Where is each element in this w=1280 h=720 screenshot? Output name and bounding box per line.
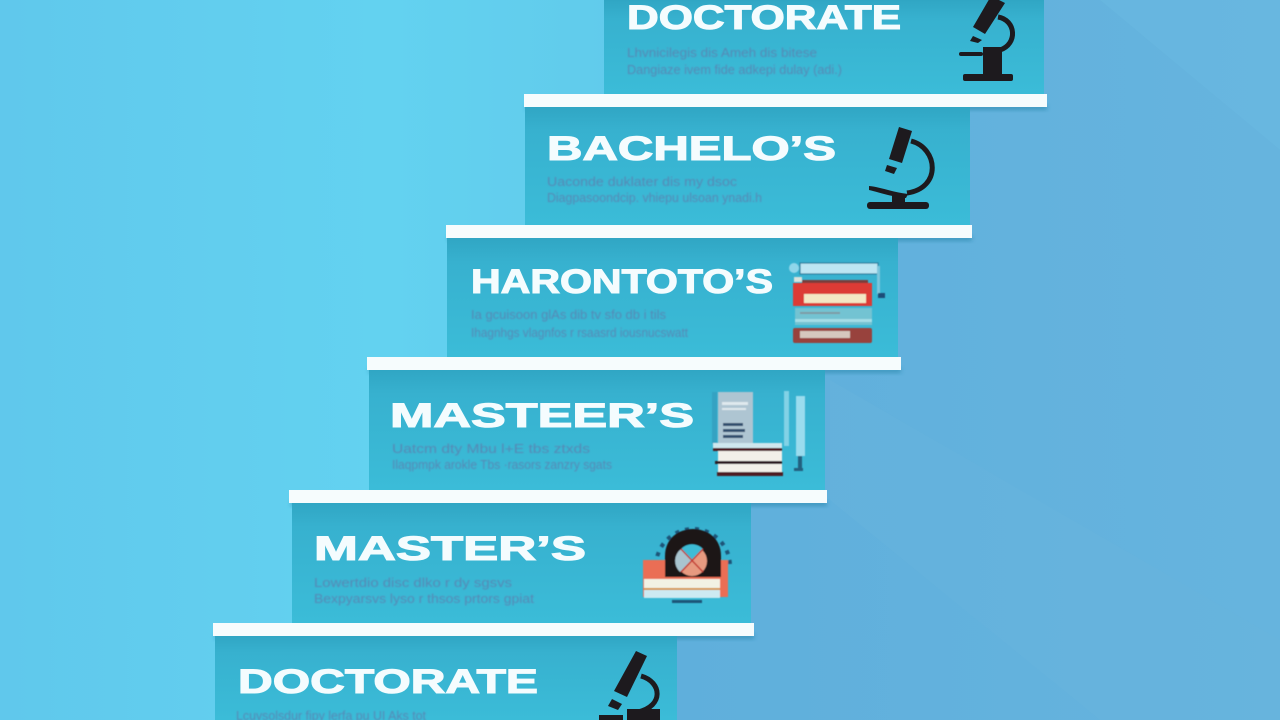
description: Ilaqpmpk arokle Tbs ·rasors zanzry sgats <box>392 457 612 472</box>
icon: microscope <box>959 0 1013 81</box>
shelf 1 <box>524 94 1047 110</box>
shelf 4 <box>289 490 827 506</box>
description <box>471 307 688 340</box>
icon: microscope <box>599 651 660 720</box>
description: Bexpyarsvs lyso r thsos prtors gpiat <box>314 591 534 606</box>
heading: doctorate: DOCTORATE <box>627 0 901 37</box>
heading: doctorate: DOCTORATE <box>238 663 538 701</box>
shelf 3 <box>367 357 901 373</box>
icon: microscope <box>867 127 932 209</box>
heading: haronto's: HARONTOTO’S <box>471 263 773 301</box>
icon: books and tube <box>712 391 805 476</box>
icon: emblem on books <box>643 529 730 603</box>
description <box>547 174 762 205</box>
step 5: master's <box>213 503 754 639</box>
step 3: haronto's <box>367 238 901 373</box>
description: Lowertdio disc dlko r dy sgsvs <box>314 575 513 590</box>
description: Ihagnhgs vlagnfos r rsaasrd iousnucswatt <box>471 325 688 340</box>
description: Uatcm dty Mbu l+E tbs ztxds <box>392 441 591 456</box>
shelf 5 <box>213 623 754 639</box>
heading: masteer's: MASTEER’S <box>390 397 694 435</box>
description: Uaconde duklater dis my dsoc <box>547 174 738 189</box>
description: Lhvnicilegis dis Ameh dis bitese <box>627 45 817 60</box>
description <box>314 575 534 606</box>
description <box>392 441 612 472</box>
step 2: bachelor's <box>446 107 972 241</box>
description: Dangiaze ivem fide adkepi dulay (adi.) <box>627 62 842 77</box>
step 4: master's <box>289 370 827 506</box>
shelf 2 <box>446 225 972 241</box>
icon: books and device <box>789 263 885 343</box>
heading: bachelor's: BACHELO’S <box>547 130 836 168</box>
heading: master's: MASTER’S <box>314 530 586 568</box>
description: Diagpasoondcip. vhiepu ulsoan ynadi.h <box>547 190 762 205</box>
description: Ia gcuisoon glAs dib tv sfo db i tils <box>471 307 666 322</box>
step 6: doctorate <box>215 636 677 720</box>
description <box>627 45 842 77</box>
step 1: doctorate <box>524 0 1047 110</box>
